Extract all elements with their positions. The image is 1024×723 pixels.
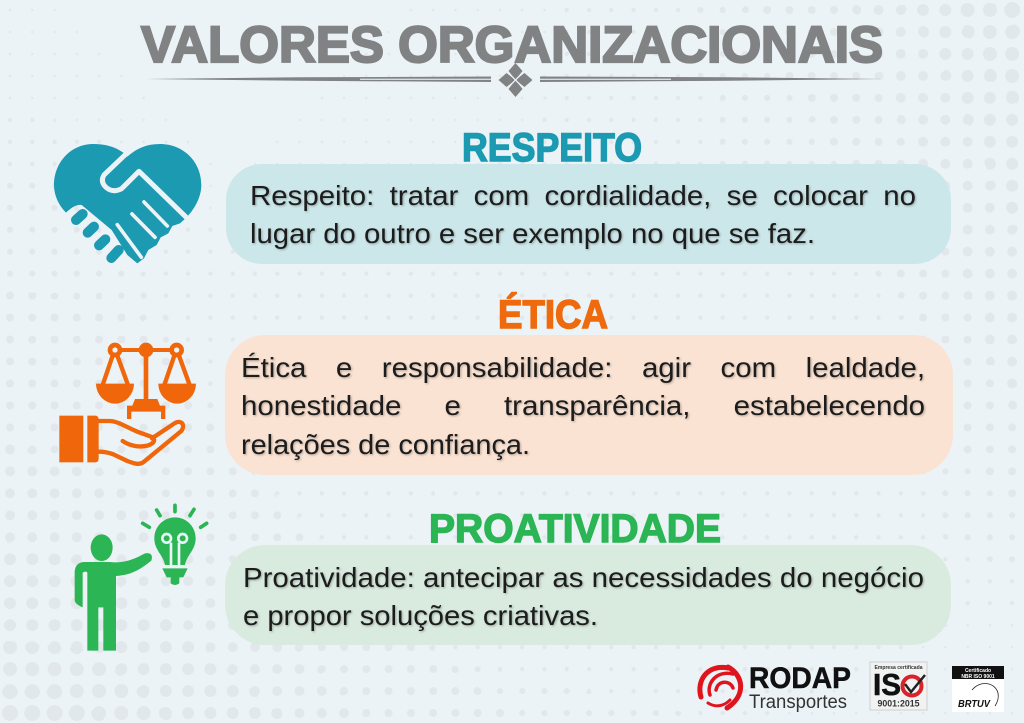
heading: proatividade: PROATIVIDADE [429,507,721,551]
panel: ética [225,335,953,475]
logo: brtuv certification [952,666,1004,712]
logo: rodap transportes: RODAP [749,662,851,695]
heading: ética: ÉTICA [498,292,608,337]
proatividade text: e propor soluções criativas. [243,600,598,631]
title: VALORES ORGANIZACIONAIS [141,16,883,73]
ética text: Ética e responsabilidade: agir com lealdade, [241,352,925,383]
logo: brtuv certification: NBR ISO 9001 [961,674,995,680]
logo: rodap transportes: Transportes [749,692,847,713]
icon: scales on a hand [59,343,196,464]
logo: rodap transportes [700,662,851,713]
logo: iso 9001 certification [870,662,927,710]
panel: proatividade [225,545,951,645]
respeito text: lugar do outro e ser exemplo no que se faz. [250,218,815,249]
logo: brtuv certification: BRTUV [958,699,991,710]
proatividade text [243,562,925,633]
ética text: honestidade e transparência, estabelecendo [241,390,925,421]
logo: iso 9001 certification: IS [873,667,901,702]
ética text [241,352,926,462]
logo: iso 9001 certification: Empresa certificada [874,665,923,671]
panel: respeito [226,164,951,264]
proatividade text: Proatividade: antecipar as necessidades do negócio [243,562,924,593]
respeito text: Respeito: tratar com cordialidade, se colocar no [250,180,916,211]
heading: respeito: RESPEITO [462,126,642,170]
icon: handshake heart [54,144,201,263]
logo: rodap red swoosh [700,667,741,708]
logo: brtuv certification: Certificado [965,668,991,674]
respeito text [250,180,917,251]
icon: person pointing at light bulb [75,505,207,651]
title divider with ornament [146,63,885,97]
logo: iso 9001 certification: 9001:2015 [878,698,920,708]
ética text: relações de confiança. [241,429,530,460]
